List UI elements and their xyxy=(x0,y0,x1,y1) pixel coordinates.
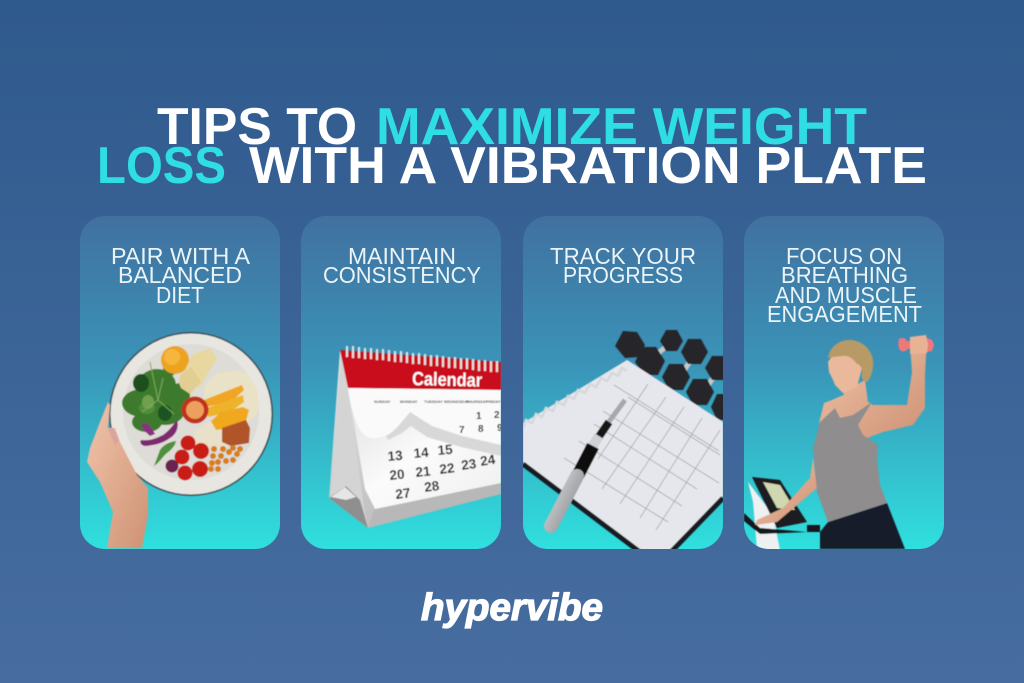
spiral binding xyxy=(347,346,497,372)
tomato half xyxy=(182,396,208,424)
orange ball xyxy=(161,346,189,374)
purple cabbage xyxy=(140,420,178,446)
panel: focus on breathing and muscle engagement xyxy=(744,216,944,550)
pen xyxy=(551,400,625,526)
icon: desk calendar: 7 xyxy=(459,425,465,436)
dates: 28 xyxy=(423,478,441,495)
panel: track your progress xyxy=(523,216,725,556)
heading: balanced diet: DIET xyxy=(156,282,204,308)
notebook page xyxy=(523,360,723,556)
calendar page xyxy=(348,388,501,509)
head xyxy=(828,355,862,393)
heading: progress: PROGRESS xyxy=(563,262,683,288)
heading: breathing xyxy=(767,243,922,327)
chickpeas xyxy=(208,445,243,472)
dumbbell xyxy=(898,338,908,351)
title: TIPS TO xyxy=(157,98,357,156)
icon: desk calendar: SUNDAY xyxy=(374,399,391,404)
icon: plate of food held by hand xyxy=(87,332,273,548)
heading: progress: TRACK YOUR xyxy=(550,243,696,269)
greens xyxy=(122,360,190,432)
heading: consistency: MAINTAIN xyxy=(348,243,456,269)
heading: consistency xyxy=(323,243,481,288)
dates: 22 xyxy=(439,460,455,477)
spiral binding xyxy=(523,368,627,428)
mash xyxy=(204,370,259,422)
icon: desk calendar: 1 xyxy=(476,411,482,422)
icon: notebook, pen and dumbbells xyxy=(523,330,725,556)
icon: desk calendar: 8 xyxy=(478,424,484,435)
curled page xyxy=(348,387,496,438)
title: WITH A VIBRATION PLATE xyxy=(249,137,927,195)
hand xyxy=(87,402,148,548)
console xyxy=(748,482,780,550)
heading: progress xyxy=(550,243,696,288)
heading: balanced diet: PAIR WITH A xyxy=(111,243,251,269)
dates: 27 xyxy=(395,485,411,502)
heading: breathing: AND MUSCLE xyxy=(775,282,917,308)
title xyxy=(97,98,927,195)
icon: desk calendar: TUESDAY xyxy=(424,399,443,404)
dates: 13 xyxy=(387,448,404,464)
dumbbell heads xyxy=(615,330,725,420)
dates: 24 xyxy=(479,452,497,469)
heading: balanced diet xyxy=(111,243,251,308)
notebook bottom edges xyxy=(523,464,723,556)
heading: balanced diet: BALANCED xyxy=(118,262,242,288)
dates: 20 xyxy=(389,466,405,483)
red header xyxy=(340,350,501,390)
icon: desk calendar: MONDAY xyxy=(400,399,418,404)
label: Calendar: Calendar xyxy=(412,369,483,392)
title: LOSS xyxy=(97,137,226,195)
dates: 23 xyxy=(460,456,478,473)
left arm xyxy=(755,458,817,525)
tank top xyxy=(813,402,887,522)
leggings xyxy=(820,503,905,549)
heading: breathing: FOCUS ON xyxy=(786,243,902,269)
chart grid xyxy=(564,384,720,530)
title: MAXIMIZE WEIGHT xyxy=(376,98,867,156)
dates: 15 xyxy=(437,442,454,458)
dates: 14 xyxy=(413,445,430,461)
meat xyxy=(222,420,250,446)
dumbbell handles xyxy=(655,344,717,387)
cherry tomatoes xyxy=(174,436,209,480)
dates xyxy=(387,442,497,502)
tofu xyxy=(184,348,217,388)
neck and shoulders xyxy=(819,338,927,438)
heading: breathing: BREATHING xyxy=(781,262,908,288)
illustration: woman with dumbbell on vibration plate xyxy=(744,335,934,550)
icon: desk calendar: 9 xyxy=(497,423,503,434)
panel: maintain consistency xyxy=(301,216,503,549)
orange slices xyxy=(204,385,244,407)
dates: 21 xyxy=(415,463,432,480)
hair xyxy=(828,340,873,382)
icon: desk calendar xyxy=(329,346,503,528)
panel: pair with a balanced diet xyxy=(80,216,280,549)
icon: desk calendar: WEDNESDAY xyxy=(444,399,470,404)
logo: hypervibe: hypervibe xyxy=(421,587,603,629)
icon: desk calendar: 2 xyxy=(494,410,500,421)
heading: breathing: ENGAGEMENT xyxy=(767,301,922,327)
heading: consistency: CONSISTENCY xyxy=(323,262,481,288)
icon: desk calendar: THURSDAY xyxy=(466,399,488,404)
icon: desk calendar: FRIDAY xyxy=(486,399,501,404)
